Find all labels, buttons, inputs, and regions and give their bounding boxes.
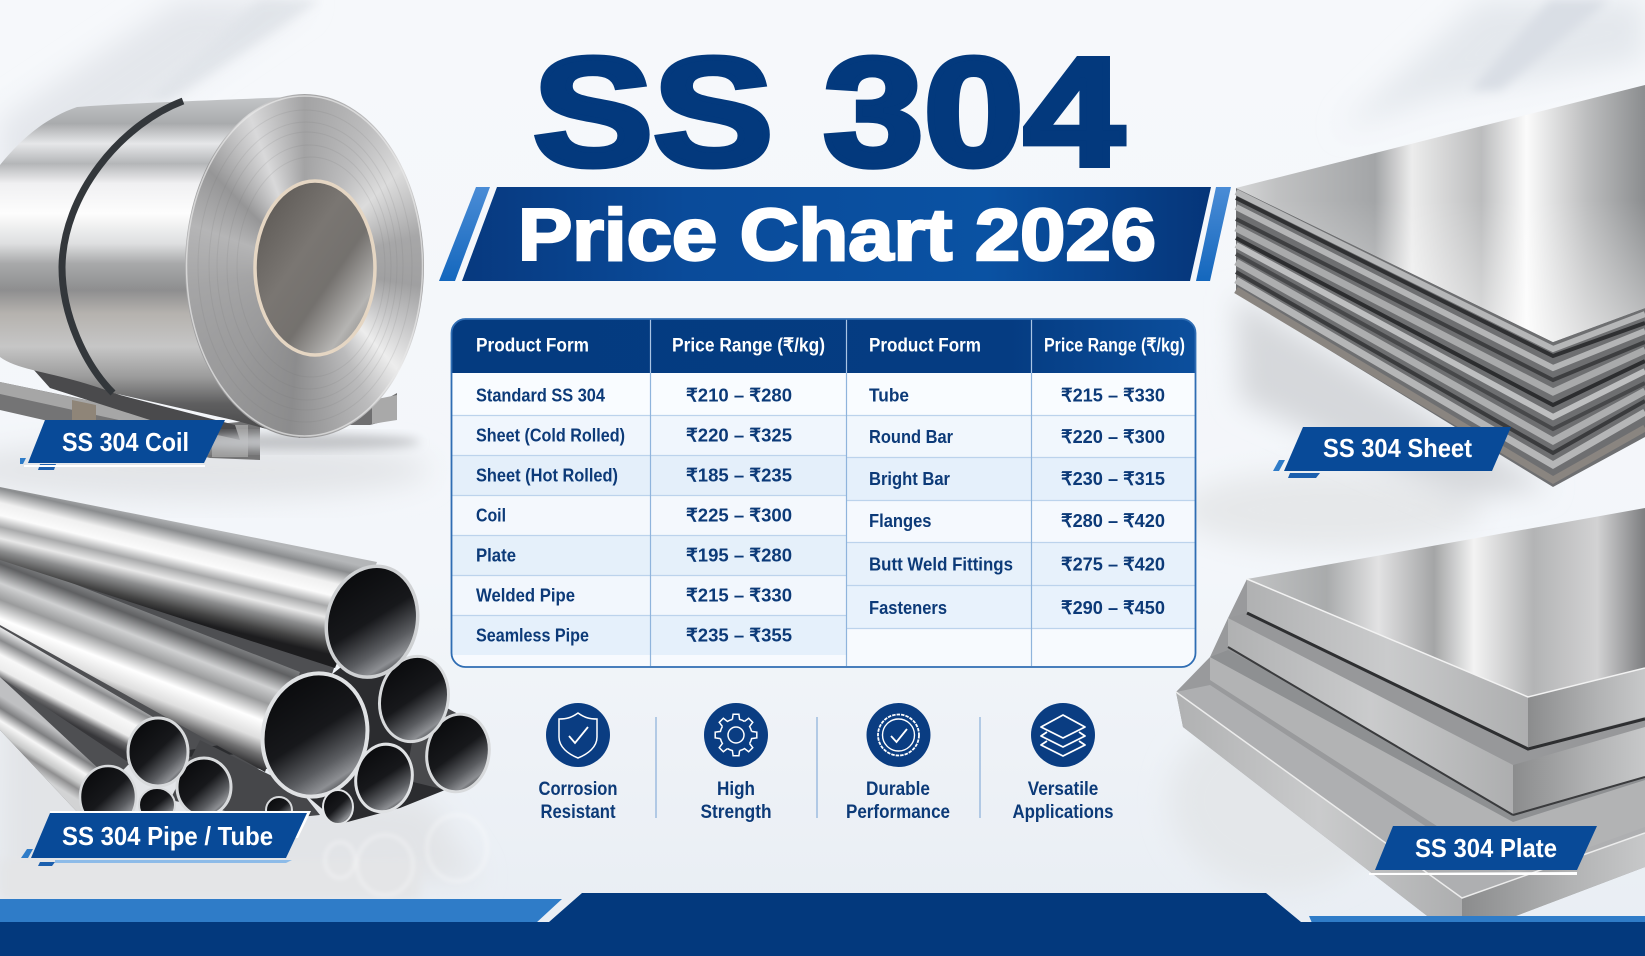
left product names [476,384,625,646]
pipe end lower right [350,739,418,817]
header labels: Price Range (₹/kg) [672,336,825,356]
plate 4 [1176,685,1645,922]
label: SS 304 Sheet: SS 304 Sheet [1323,433,1472,463]
icon: shield with check [546,703,610,767]
feature text: Performance [846,802,950,823]
left product names: Standard SS 304 [476,384,606,406]
feature text: Versatile [1028,779,1098,800]
feature: versatile applications [1012,703,1114,823]
coil winding rings [186,96,422,436]
price table [451,319,1196,667]
label: SS 304 Sheet [1273,427,1511,478]
sheet stack sides [1236,188,1645,487]
table border [452,319,1196,667]
right prices: ₹220 – ₹300 [1061,426,1165,447]
feature: high strength [700,703,772,823]
right prices: ₹230 – ₹315 [1061,468,1165,489]
sheet top surface [1236,85,1645,342]
right product names [869,384,1013,618]
coil end face [185,94,425,438]
header labels: Product Form [476,336,589,356]
pipe lower left [0,627,188,786]
left product names: Sheet (Cold Rolled) [476,424,625,446]
pipe shadows and dark backing [128,660,450,824]
feature text: Strength [700,802,772,823]
footer left light band [0,899,562,923]
label: SS 304 Pipe / Tube [21,811,311,866]
title: SS 304 [533,26,1124,198]
left prices: ₹210 – ₹280 [686,384,792,406]
pipe large centre [0,555,379,806]
footer band [0,893,1645,956]
small pipe ends [139,758,353,824]
left product names: Welded Pipe [476,584,575,606]
icon: badge with check [866,703,930,767]
left product names: Coil [476,504,506,526]
right product names: Tube [869,384,909,406]
photo: steel coil on pallet [0,94,425,460]
table header [452,319,1195,373]
right product names: Flanges [869,510,932,531]
floor reflections [325,815,487,895]
feature text: Durable [866,779,930,800]
right accent stripe [1196,187,1231,281]
right product names: Butt Weld Fittings [869,554,1013,574]
right prices [1061,384,1165,618]
table body background [451,319,1196,667]
feature text [700,779,772,823]
left prices [686,384,792,646]
pipe bottom left [0,677,136,828]
right product names: Round Bar [869,426,953,447]
header labels: Product Form [869,336,981,356]
plate stack backing [1176,579,1645,922]
feature text [538,779,618,823]
plate 2 [1228,612,1645,815]
feature text: Resistant [540,802,616,823]
label: SS 304 Plate: SS 304 Plate [1415,833,1557,863]
subtitle banner [439,187,1231,281]
feature text: High [717,779,755,800]
right prices: ₹290 – ₹450 [1061,597,1165,618]
pipe top [0,487,429,687]
table grid lines [452,372,1195,666]
plate 1 [1247,508,1645,749]
pipe end upper right [372,650,456,748]
label: SS 304 Plate [1369,826,1597,875]
left rows [452,373,846,655]
pallet [0,360,420,460]
feature text: Corrosion [538,779,618,800]
feature dividers [656,717,980,818]
left product names: Plate [476,544,516,566]
icon: gear [704,703,768,767]
left prices: ₹185 – ₹235 [686,464,792,486]
photo: stacked sheets [1236,85,1645,500]
right prices: ₹275 – ₹420 [1061,554,1165,574]
header labels [476,336,1185,356]
feature: corrosion resistant [538,703,618,823]
label: SS 304 Pipe / Tube: SS 304 Pipe / Tube [62,821,273,851]
coil body [0,97,310,438]
header labels: Price Range (₹/kg) [1044,336,1185,356]
footer dark band [0,893,1645,956]
pipe backing [0,530,340,815]
feature text [1012,779,1114,823]
sheet shadow [1236,295,1550,500]
left prices: ₹235 – ₹355 [686,624,792,646]
icon: stacked layers [1031,703,1095,767]
feature text: Applications [1012,802,1114,823]
left prices: ₹195 – ₹280 [686,544,792,566]
left product names: Seamless Pipe [476,624,589,646]
feature: durable performance [846,703,950,823]
left prices: ₹220 – ₹325 [686,424,792,446]
right rows [846,373,1195,628]
feature text [846,779,950,823]
right product names: Fasteners [869,597,947,618]
coil hole [255,181,375,355]
footer right light band [1309,916,1645,923]
right product names: Bright Bar [869,468,950,489]
left accent stripe [439,187,490,281]
photo: stacked plates [1176,508,1645,922]
rear pipe end right [405,700,495,797]
left prices: ₹215 – ₹330 [686,584,792,606]
left product names: Sheet (Hot Rolled) [476,464,618,486]
banner text: Price Chart 2026 [518,195,1156,276]
banner shape [462,187,1211,281]
right prices: ₹215 – ₹330 [1061,384,1165,406]
photo: stainless pipes [0,487,495,895]
left prices: ₹225 – ₹300 [686,504,792,526]
strapping band [62,101,183,393]
label: SS 304 Coil: SS 304 Coil [62,427,189,457]
label: SS 304 Coil [20,420,225,470]
right prices: ₹280 – ₹420 [1061,510,1165,531]
plate 3 [1210,650,1645,875]
